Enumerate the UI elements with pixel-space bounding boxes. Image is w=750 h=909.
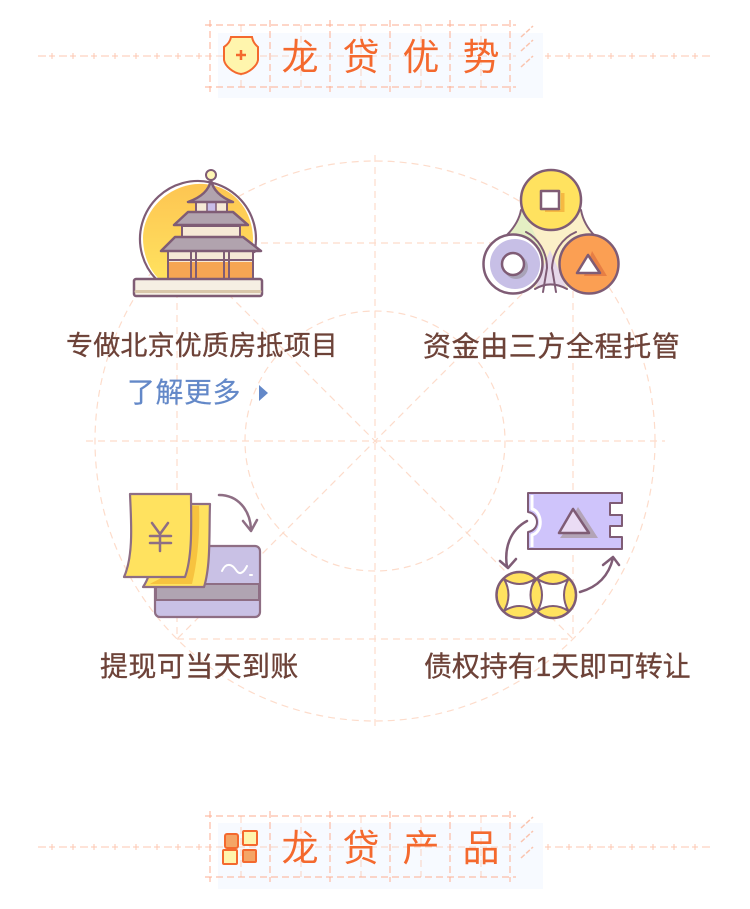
heading text: 龙贷优势 bbox=[282, 27, 500, 81]
arrow: learn more bbox=[259, 385, 268, 401]
heading text: 龙贷优势: 优 bbox=[402, 27, 440, 81]
icon: shield bbox=[224, 37, 258, 74]
link: learn more: 了解更多 bbox=[127, 377, 241, 408]
icon: three coins bbox=[484, 170, 618, 294]
text: same-day withdrawal: 提现可当天到账 bbox=[100, 651, 299, 682]
text: Beijing mortgage projects: 专做北京优质房抵项目 bbox=[66, 331, 338, 361]
text: funds custody: 资金由三方全程托管 bbox=[423, 331, 680, 362]
heading text: 龙贷产品: 贷 bbox=[342, 818, 380, 872]
heading text: 龙贷产品: 产 bbox=[402, 818, 440, 872]
text: debt transfer: 债权持有1天即可转让 bbox=[424, 651, 691, 682]
heading band: products bbox=[38, 811, 712, 889]
heading band: advantages bbox=[38, 20, 712, 98]
heading text: 龙贷优势: 势 bbox=[462, 27, 500, 81]
background compass diagram bbox=[86, 155, 665, 728]
heading text: 龙贷优势: 龙 bbox=[282, 27, 318, 81]
icon: temple of heaven bbox=[134, 170, 262, 296]
heading text: 龙贷优势: 贷 bbox=[342, 27, 380, 81]
icon: ticket and coins bbox=[496, 493, 622, 618]
icon: bank note and card bbox=[124, 494, 260, 617]
icon: product grid bbox=[223, 831, 257, 864]
heading text: 龙贷产品: 龙 bbox=[282, 818, 318, 872]
heading text: 龙贷产品 bbox=[282, 818, 500, 872]
heading text: 龙贷产品: 品 bbox=[462, 818, 500, 872]
